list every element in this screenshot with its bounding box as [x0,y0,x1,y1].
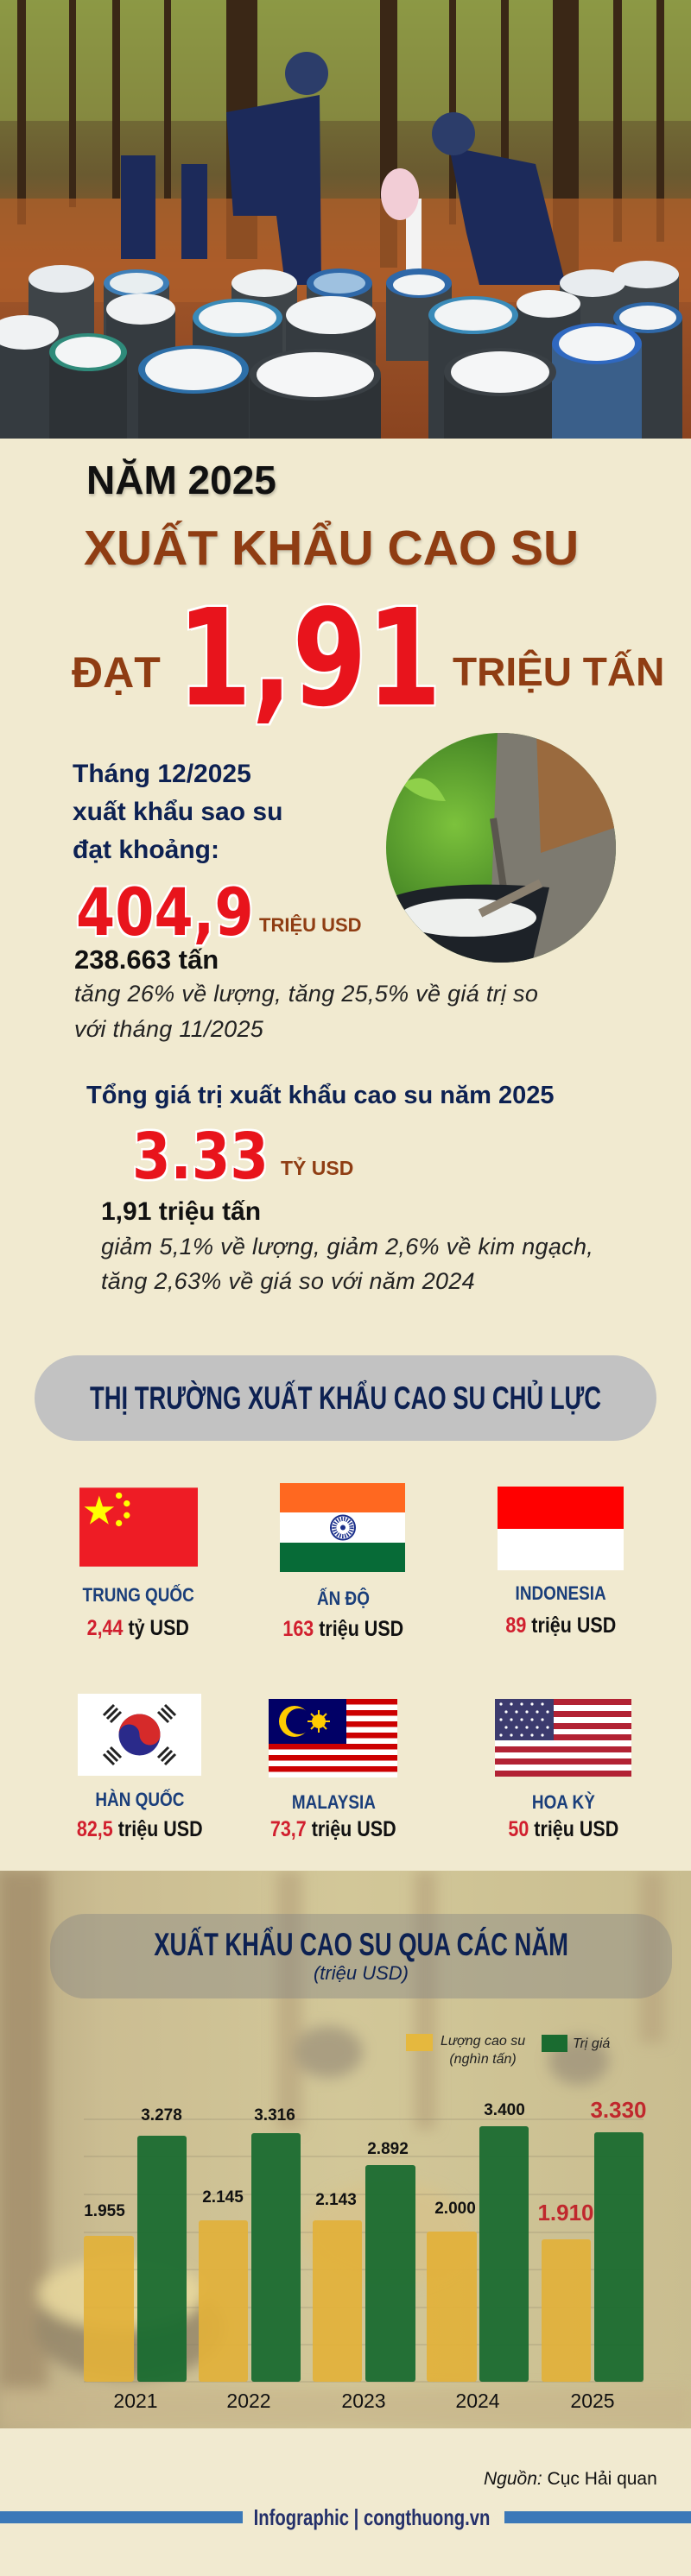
section header: main markets [35,1355,656,1441]
bar chart: rubber exports 2021-2025: 2.143 [315,2191,357,2209]
text block: December 2025: xuất khẩu sao su [73,798,282,826]
market: South Korea: 82,5 triệu USD [77,1817,203,1841]
front row [49,323,642,439]
headline: ĐẠT 1,91 TRIỆU TẤN [72,582,664,737]
market: Indonesia: INDONESIA [515,1582,606,1604]
flag: Malaysia [269,1699,397,1777]
headline: ĐẠT 1,91 TRIỆU TẤN: TRIỆU TẤN [453,649,664,694]
market: Malaysia [269,1699,397,1841]
market: Indonesia: 89 triệu USD [505,1613,616,1638]
market: Malaysia: 73,7 triệu USD [270,1817,396,1841]
stat: 404,9 triệu USD: 404,9 [76,875,254,951]
text: monthly growth: với tháng 11/2025 [74,1016,263,1042]
market: India: ẤN ĐỘ [317,1588,369,1609]
section header: main markets: THỊ TRƯỜNG XUẤT KHẨU CAO SU CHỦ LỰC [90,1380,601,1416]
bar chart: rubber exports 2021-2025: 3.278 [141,2106,182,2125]
bar chart: rubber exports 2021-2025: 3.400 [484,2101,525,2119]
title: NĂM 2025: NĂM 2025 [86,458,276,502]
text: yearly change: giảm 5,1% về lượng, giảm 2,6% về kim ngạch, [101,1234,593,1260]
stat: 3.33 tỷ USD: 3.33 [132,1121,269,1194]
stat: 3.33 tỷ USD [132,1121,353,1194]
footer brand bar [0,2504,691,2530]
market: China [79,1487,198,1640]
chart background photo [0,1871,691,2428]
bar chart: rubber exports 2021-2025: 2.892 [367,2140,409,2158]
source note: Nguồn: Cục Hải quan [484,2469,657,2489]
market: South Korea: HÀN QUỐC [95,1789,185,1810]
hero photo: rubber latex buckets [0,0,691,439]
bar chart: rubber exports 2021-2025: 3.330 [590,2097,647,2123]
photo: rubber tapping circle [386,733,616,963]
text: monthly growth: tăng 26% về lượng, tăng 25,5% về giá trị so [74,981,538,1007]
stat: 404,9 triệu USD: TRIỆU USD [259,914,362,936]
bar chart: rubber exports 2021-2025: 1.955 [84,2202,125,2220]
flag: USA [495,1699,631,1777]
flag: South Korea [78,1694,201,1776]
text: yearly change: tăng 2,63% về giá so với năm 2024 [101,1268,475,1294]
bar chart: rubber exports 2021-2025 [84,2097,647,2412]
bar chart: rubber exports 2021-2025: 1.910 [537,2200,594,2226]
text: yearly change [101,1234,593,1294]
stat: 1,91 triệu tấn: 1,91 triệu tấn [101,1197,261,1226]
chart legend: Trị giá [573,2036,610,2051]
middle row [0,290,682,439]
market: India [280,1483,405,1641]
chart title panel: XUẤT KHẨU CAO SU QUA CÁC NĂM [154,1927,568,1962]
bar chart: rubber exports 2021-2025: 2.000 [434,2200,476,2218]
headline: ĐẠT 1,91 TRIỆU TẤN: 1,91 [177,582,441,737]
market: South Korea [77,1694,203,1841]
text: monthly growth [74,981,538,1042]
chart title panel [50,1914,672,1998]
market: USA: HOA KỲ [532,1791,594,1813]
market: Malaysia: MALAYSIA [291,1791,376,1813]
market: China: TRUNG QUỐC [82,1584,194,1606]
market: Indonesia [498,1487,624,1638]
market: India: 163 triệu USD [282,1617,403,1641]
back row buckets [29,261,679,361]
market: USA: 50 triệu USD [508,1817,618,1841]
flag: China [79,1487,198,1567]
bar chart: rubber exports 2021-2025: 2024 [455,2390,500,2412]
market: USA [495,1699,631,1841]
chart title panel: (triệu USD) [314,1962,409,1984]
bar chart: rubber exports 2021-2025: 2.145 [202,2188,244,2207]
text block: December 2025: đạt khoảng: [73,836,219,864]
stat: 404,9 triệu USD [76,875,362,951]
chart legend: (nghìn tấn) [449,2052,517,2067]
footer brand bar: Infographic | congthuong.vn [254,2504,491,2530]
bar chart: rubber exports 2021-2025: 2021 [113,2390,158,2412]
bar chart: rubber exports 2021-2025: 3.316 [254,2106,295,2125]
flag: India [280,1483,405,1572]
bar chart: rubber exports 2021-2025: 2022 [226,2390,271,2412]
chart legend: Lượng cao su [441,2034,525,2049]
heading: total 2025: Tổng giá trị xuất khẩu cao su năm 2025 [86,1082,554,1109]
title: XUẤT KHẨU CAO SU: XUẤT KHẨU CAO SU [84,521,579,576]
text block: December 2025: Tháng 12/2025 [73,760,251,788]
people [121,52,566,285]
text block: December 2025 [73,760,282,864]
chart legend [406,2034,610,2067]
stat: 238.663 tấn: 238.663 tấn [74,944,219,975]
flag: Indonesia [498,1487,624,1570]
stat: 3.33 tỷ USD: TỶ USD [281,1157,353,1179]
headline: ĐẠT 1,91 TRIỆU TẤN: ĐẠT [72,648,161,697]
bar chart: rubber exports 2021-2025: 2025 [570,2390,615,2412]
bar chart: rubber exports 2021-2025: 2023 [341,2390,386,2412]
market: China: 2,44 tỷ USD [87,1616,189,1640]
